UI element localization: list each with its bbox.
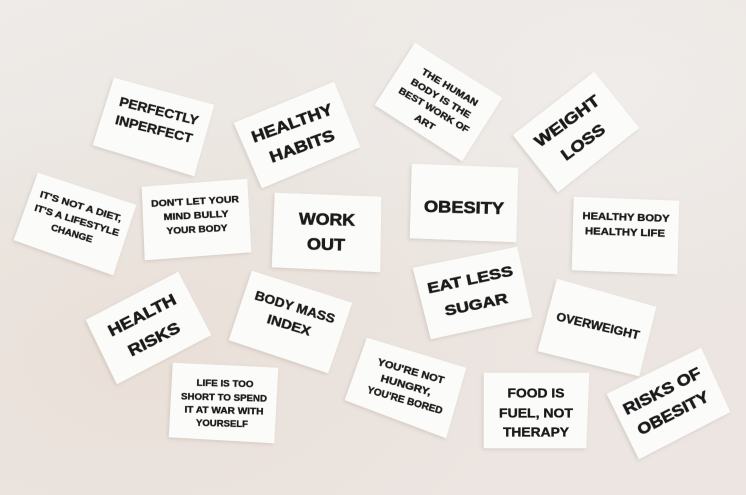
card: Healthy body healthy life: HEALTHY BODY <box>582 211 670 225</box>
card: Perfectly Inperfect <box>93 78 214 176</box>
card: Overweight <box>538 279 656 376</box>
card: Life is too short: SHORT TO SPEND <box>181 391 267 405</box>
card: It's not a diet <box>14 173 136 275</box>
card: Risks of Obesity: OBESITY <box>635 388 713 439</box>
card: Weight Loss <box>513 72 639 192</box>
card: You're not hungry, you're bored: YOU'RE BORED <box>366 385 444 417</box>
card: Life is too short: LIFE IS TOO <box>196 378 254 390</box>
card: The human body is the best work of art: ART <box>413 112 437 132</box>
card: You're not hungry, you're bored <box>345 338 466 438</box>
card: The human body is the best work of art: BEST WORK OF <box>397 85 471 135</box>
card: Life is too short <box>169 363 278 443</box>
card: Eat Less Sugar: SUGAR <box>443 290 509 320</box>
card: Food is fuel, not therapy: THERAPY <box>503 426 570 440</box>
card: Healthy Habits <box>234 82 360 188</box>
card: Health Risks <box>86 272 211 384</box>
card: Risks of Obesity: RISKS OF <box>621 365 704 419</box>
card: It's not a diet: IT'S NOT A DIET, <box>38 189 123 225</box>
card: Eat Less Sugar: EAT LESS <box>426 263 515 297</box>
card: Life is too short: IT AT WAR WITH <box>184 404 264 417</box>
card: Healthy Habits: HABITS <box>268 127 337 167</box>
card: Body Mass Index: INDEX <box>265 312 313 339</box>
card: Overweight: OVERWEIGHT <box>555 312 641 343</box>
card: Don't let your mind bully your body <box>142 179 251 260</box>
card: Work Out <box>272 193 381 272</box>
card: It's not a diet: CHANGE <box>50 222 94 245</box>
card: Don't let your mind bully your body: DON'T LET YOUR <box>151 194 239 210</box>
card: Life is too short: YOURSELF <box>196 418 248 430</box>
card: Healthy body healthy life <box>572 197 679 274</box>
card: Work Out: WORK <box>299 210 355 230</box>
card: It's not a diet: IT'S A LIFESTYLE <box>33 203 120 239</box>
card: Healthy Habits: HEALTHY <box>250 101 336 147</box>
card: Perfectly Inperfect: INPERFECT <box>114 113 194 146</box>
card: The human body is the best work of art <box>375 43 502 161</box>
card: Food is fuel, not therapy: FUEL, NOT <box>499 406 573 420</box>
card: Perfectly Inperfect: PERFECTLY <box>118 95 201 128</box>
card: Weight Loss: WEIGHT <box>532 92 604 151</box>
card: Don't let your mind bully your body: MIND BULLY <box>163 209 230 223</box>
card: Food is fuel, not therapy: FOOD IS <box>508 386 564 400</box>
card: Body Mass Index: BODY MASS <box>253 289 337 326</box>
card: Don't let your mind bully your body: YOUR BODY <box>166 223 228 237</box>
card: Health Risks: HEALTH <box>106 292 179 340</box>
card: The human body is the best work of art: THE HUMAN <box>420 66 480 108</box>
card: The human body is the best work of art: BODY IS THE <box>409 76 473 120</box>
card: Health Risks: RISKS <box>126 320 183 360</box>
card: Body Mass Index <box>229 271 352 373</box>
card: You're not hungry, you're bored: HUNGRY, <box>379 374 432 399</box>
card: Obesity <box>410 164 518 242</box>
card: Risks of Obesity <box>607 348 730 459</box>
card: Healthy body healthy life: HEALTHY LIFE <box>585 226 665 240</box>
card: Eat Less Sugar <box>413 247 532 339</box>
card: Weight Loss: LOSS <box>558 121 609 164</box>
card: Work Out: OUT <box>307 235 345 254</box>
card: Food is fuel, not therapy <box>484 373 589 448</box>
card: You're not hungry, you're bored: YOU'RE NOT <box>376 357 445 387</box>
card: Obesity: OBESITY <box>424 198 504 218</box>
